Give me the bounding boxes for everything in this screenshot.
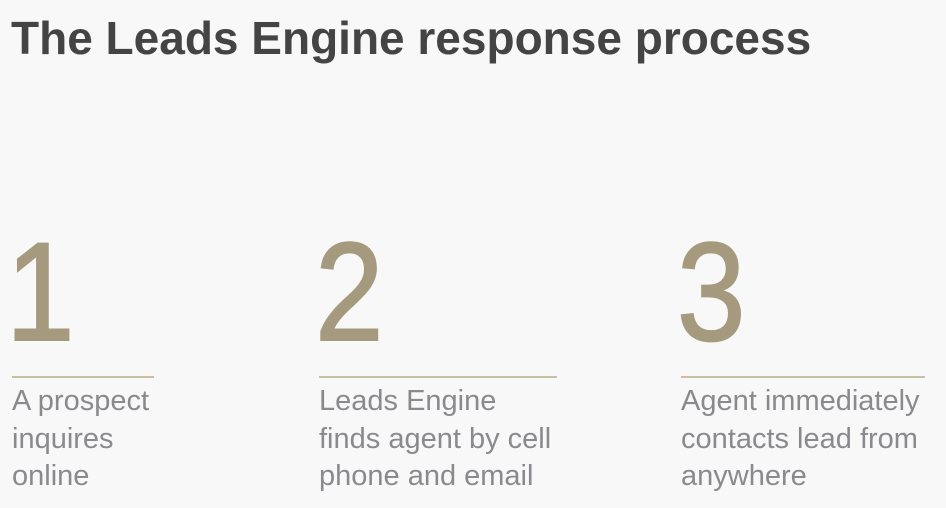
title: The Leads Engine response process: [11, 12, 811, 64]
step 2: [315, 213, 557, 492]
step 2 text: phone and email: [319, 460, 533, 492]
step 3 text: [681, 385, 920, 492]
step 1: [6, 213, 154, 492]
step 3 text: Agent immediately: [681, 385, 920, 417]
step 2 text: Leads Engine: [319, 385, 496, 417]
step 1 text: inquires: [12, 422, 114, 454]
step 1 text: online: [12, 460, 89, 492]
number 1: 1: [6, 213, 75, 370]
step 3: [677, 213, 925, 492]
step 3 text: anywhere: [681, 460, 807, 492]
step 2 text: [319, 385, 551, 492]
step 1 text: A prospect: [12, 385, 149, 417]
step 3 text: contacts lead from: [681, 422, 918, 454]
number 3: 3: [677, 213, 746, 370]
step 2 text: finds agent by cell: [319, 422, 551, 454]
step 1 text: [12, 385, 149, 492]
number 2: 2: [315, 213, 384, 370]
